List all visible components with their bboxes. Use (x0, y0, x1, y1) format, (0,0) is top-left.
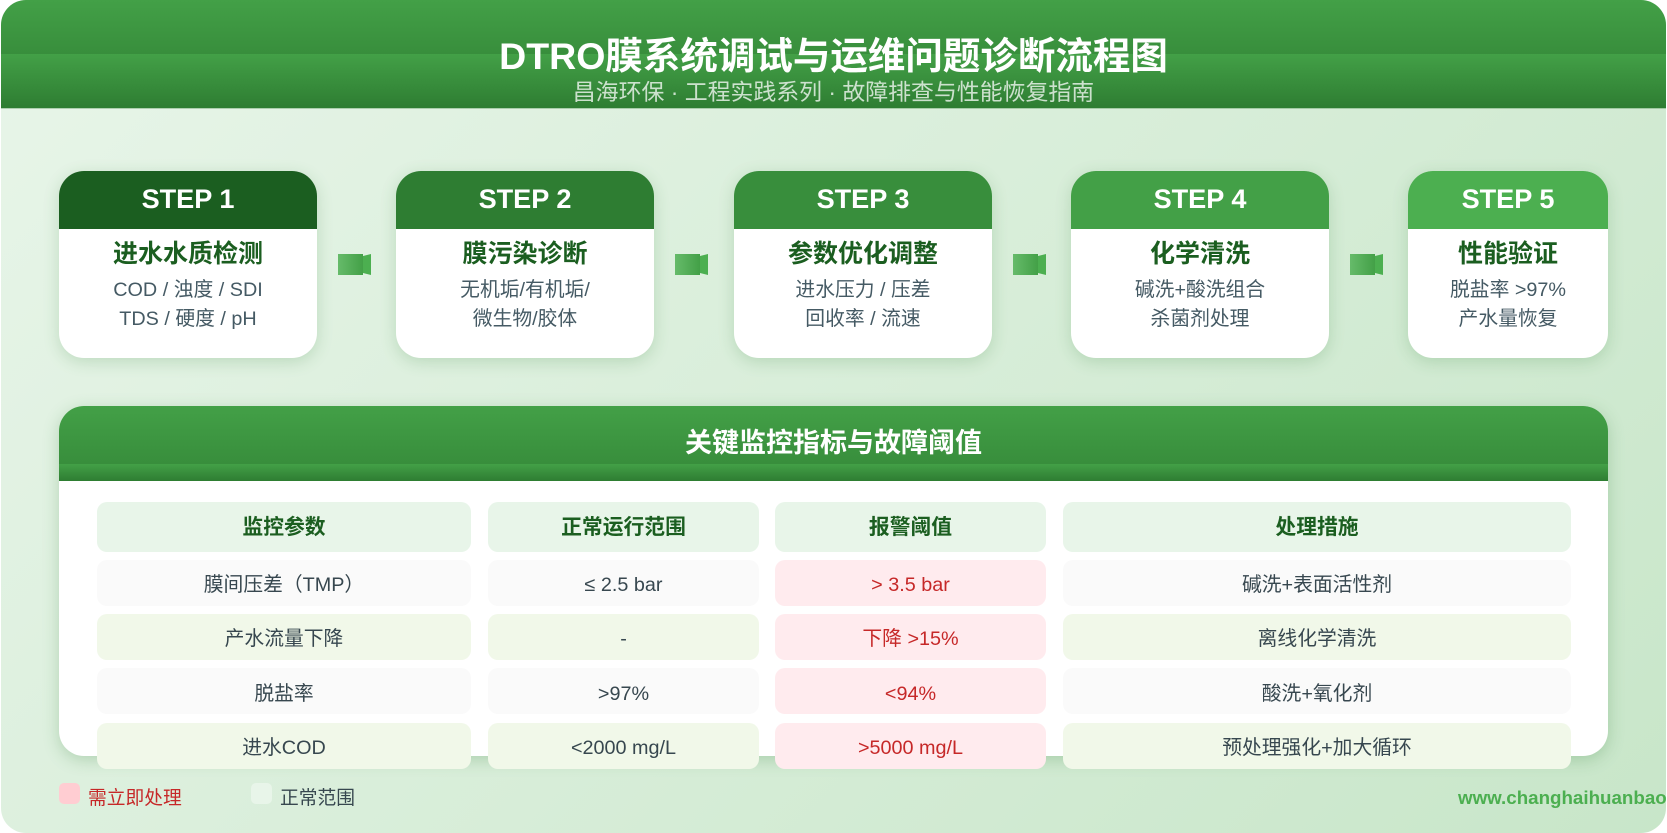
step 4 description: 碱洗+酸洗组合 (1135, 279, 1265, 301)
step 1 header: STEP 1 (142, 183, 234, 214)
panel: step 3 (734, 171, 992, 358)
table panel heading: 关键监控指标与故障阈值 (685, 428, 982, 458)
table header: alarm threshold (775, 502, 1046, 552)
table header: normal range (488, 502, 759, 552)
row 4 action (1063, 723, 1571, 769)
title: DTRO膜系统调试与运维问题诊断流程图 (499, 35, 1168, 77)
row 2 parameter (97, 614, 471, 660)
row 3 parameter: 脱盐率 (254, 683, 314, 705)
row 2 alarm: 下降 >15% (862, 628, 959, 650)
step 3 header (734, 171, 992, 229)
arrow 1 to 2 (338, 254, 371, 275)
subtitle: 昌海环保 · 工程实践系列 · 故障排查与性能恢复指南 (573, 79, 1094, 105)
row 1 action (1063, 560, 1571, 606)
row 4 alarm (775, 723, 1046, 769)
step 3 description: 回收率 / 流速 (805, 308, 921, 330)
row 4 normal: <2000 mg/L (571, 737, 676, 759)
step 5 header: STEP 5 (1462, 183, 1554, 214)
step 1 description: COD / 浊度 / SDI (113, 279, 263, 301)
table header: action (1063, 502, 1571, 552)
step 2 header: STEP 2 (479, 183, 571, 214)
panel: step 4 (1071, 171, 1329, 358)
row 1 normal: ≤ 2.5 bar (585, 574, 662, 596)
row 2 normal: - (620, 628, 627, 650)
row 4 action: 预处理强化+加大循环 (1222, 737, 1412, 759)
row 2 normal (488, 614, 759, 660)
table header: alarm threshold: 报警阈值 (869, 516, 952, 539)
row 1 normal (488, 560, 759, 606)
table panel header lower (59, 464, 1608, 481)
row 1 alarm: > 3.5 bar (871, 574, 950, 596)
legend label: normal: 正常范围 (280, 787, 355, 808)
step 3 description (795, 279, 931, 330)
row 3 alarm (775, 668, 1046, 714)
step 2 description: 无机垢/有机垢/ (460, 279, 590, 301)
panel: step 1 (59, 171, 317, 358)
row 3 parameter (97, 668, 471, 714)
step 5 description: 产水量恢复 (1459, 308, 1557, 330)
panel: monitoring table background (59, 406, 1608, 756)
table header: normal range: 正常运行范围 (561, 516, 686, 539)
row 3 normal: >97% (598, 683, 649, 705)
step 4 title: 化学清洗 (1150, 240, 1250, 268)
panel: step 2 (396, 171, 654, 358)
row 2 action: 离线化学清洗 (1258, 628, 1376, 650)
website footer: www.changhaihuanbao (1458, 787, 1666, 808)
header band upper (1, 0, 1666, 54)
row 4 alarm: >5000 mg/L (858, 737, 963, 759)
step 4 header (1071, 171, 1329, 229)
step 4 description (1135, 279, 1265, 330)
table header: parameter (97, 502, 471, 552)
legend label: urgent: 需立即处理 (88, 787, 182, 808)
legend swatch: urgent (59, 783, 80, 804)
header band lower (1, 54, 1666, 108)
legend swatch: normal (251, 783, 272, 804)
step 4 description: 杀菌剂处理 (1151, 308, 1249, 330)
arrow 3 to 4 (1013, 254, 1046, 275)
step 1 description (113, 279, 263, 330)
step 5 description: 脱盐率 >97% (1450, 279, 1566, 301)
row 2 alarm (775, 614, 1046, 660)
row 4 normal (488, 723, 759, 769)
step 2 title: 膜污染诊断 (462, 240, 588, 268)
row 1 alarm (775, 560, 1046, 606)
panel: step 5 (1408, 171, 1608, 358)
row 4 parameter: 进水COD (242, 737, 326, 759)
step 1 title: 进水水质检测 (113, 240, 263, 268)
step 2 description: 微生物/胶体 (473, 308, 577, 330)
step 3 title: 参数优化调整 (788, 240, 938, 268)
row 3 action (1063, 668, 1571, 714)
step 5 title: 性能验证 (1458, 240, 1558, 268)
arrow 4 to 5 (1350, 254, 1383, 275)
table header: parameter: 监控参数 (242, 516, 326, 539)
step 2 header (396, 171, 654, 229)
row 1 parameter: 膜间压差（TMP） (204, 574, 364, 596)
step 5 header (1408, 171, 1608, 229)
table header: action: 处理措施 (1275, 516, 1359, 539)
step 1 header (59, 171, 317, 229)
table panel header upper (59, 406, 1608, 464)
step 2 description (460, 279, 590, 330)
row 3 normal (488, 668, 759, 714)
row 2 parameter: 产水流量下降 (225, 628, 343, 650)
arrow 2 to 3 (675, 254, 708, 275)
row 4 parameter (97, 723, 471, 769)
step 4 header: STEP 4 (1154, 183, 1246, 214)
row 2 action (1063, 614, 1571, 660)
step 3 description: 进水压力 / 压差 (795, 279, 931, 301)
step 3 header: STEP 3 (817, 183, 909, 214)
row 1 action: 碱洗+表面活性剂 (1242, 574, 1392, 596)
step 1 description: TDS / 硬度 / pH (119, 308, 257, 330)
row 3 action: 酸洗+氧化剂 (1262, 683, 1372, 705)
step 5 description (1450, 279, 1566, 330)
row 1 parameter (97, 560, 471, 606)
row 3 alarm: <94% (885, 683, 936, 705)
